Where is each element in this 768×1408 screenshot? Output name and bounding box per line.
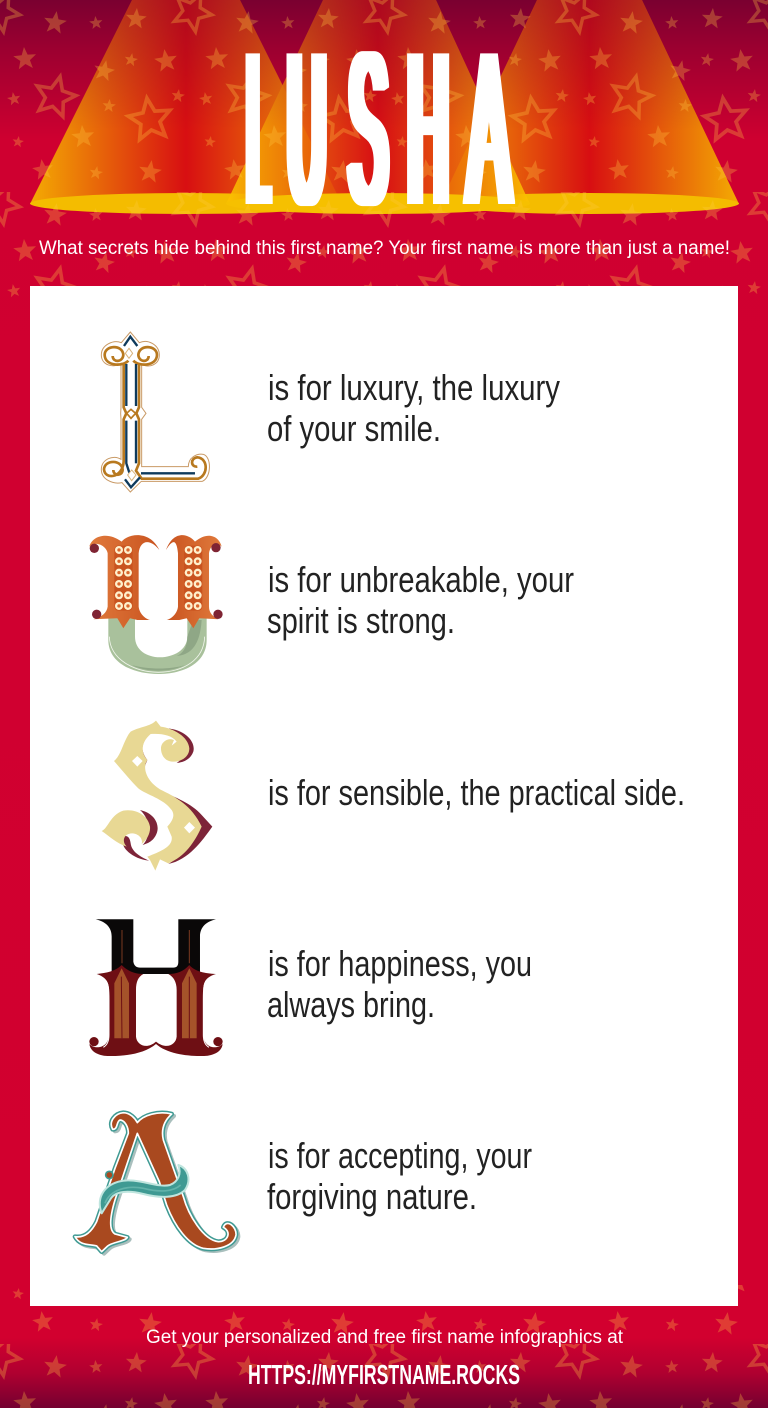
star pattern bottom <box>0 1285 768 1408</box>
row 4 text: is for happiness, you <box>268 943 532 984</box>
row 2 text: spirit is strong. <box>267 600 455 641</box>
white panel <box>30 286 738 1306</box>
letter U icon <box>89 535 223 674</box>
row 1 text: is for luxury, the luxury <box>268 367 560 408</box>
letter L icon <box>101 332 209 492</box>
spotlight cones <box>30 0 739 214</box>
row 4 text: always bring. <box>267 984 435 1025</box>
letter S icon <box>102 721 212 871</box>
row 2 text: is for unbreakable, your <box>268 559 574 600</box>
footer prompt: Get your personalized and free first name infographics at <box>146 1327 624 1348</box>
row 5 text: forgiving nature. <box>267 1176 477 1217</box>
footer url: HTTPS://MYFIRSTNAME.ROCKS <box>248 1359 520 1390</box>
title: U <box>288 9 325 250</box>
row 1 text <box>267 367 560 449</box>
title <box>248 7 510 250</box>
row 4 text <box>267 943 532 1025</box>
star pattern top <box>0 0 768 300</box>
row 1 text: of your smile. <box>267 408 441 449</box>
row 5 text <box>267 1135 532 1217</box>
letter A icon <box>75 1113 238 1254</box>
title: L <box>248 8 268 249</box>
subtitle: What secrets hide behind this first name? Your first name is more than just a name! <box>39 238 730 259</box>
title: A <box>468 7 510 249</box>
title: S <box>349 9 387 249</box>
letter H icon <box>89 919 223 1056</box>
title: H <box>408 9 448 250</box>
row 5 text: is for accepting, your <box>268 1135 532 1176</box>
row 2 text <box>267 559 574 641</box>
